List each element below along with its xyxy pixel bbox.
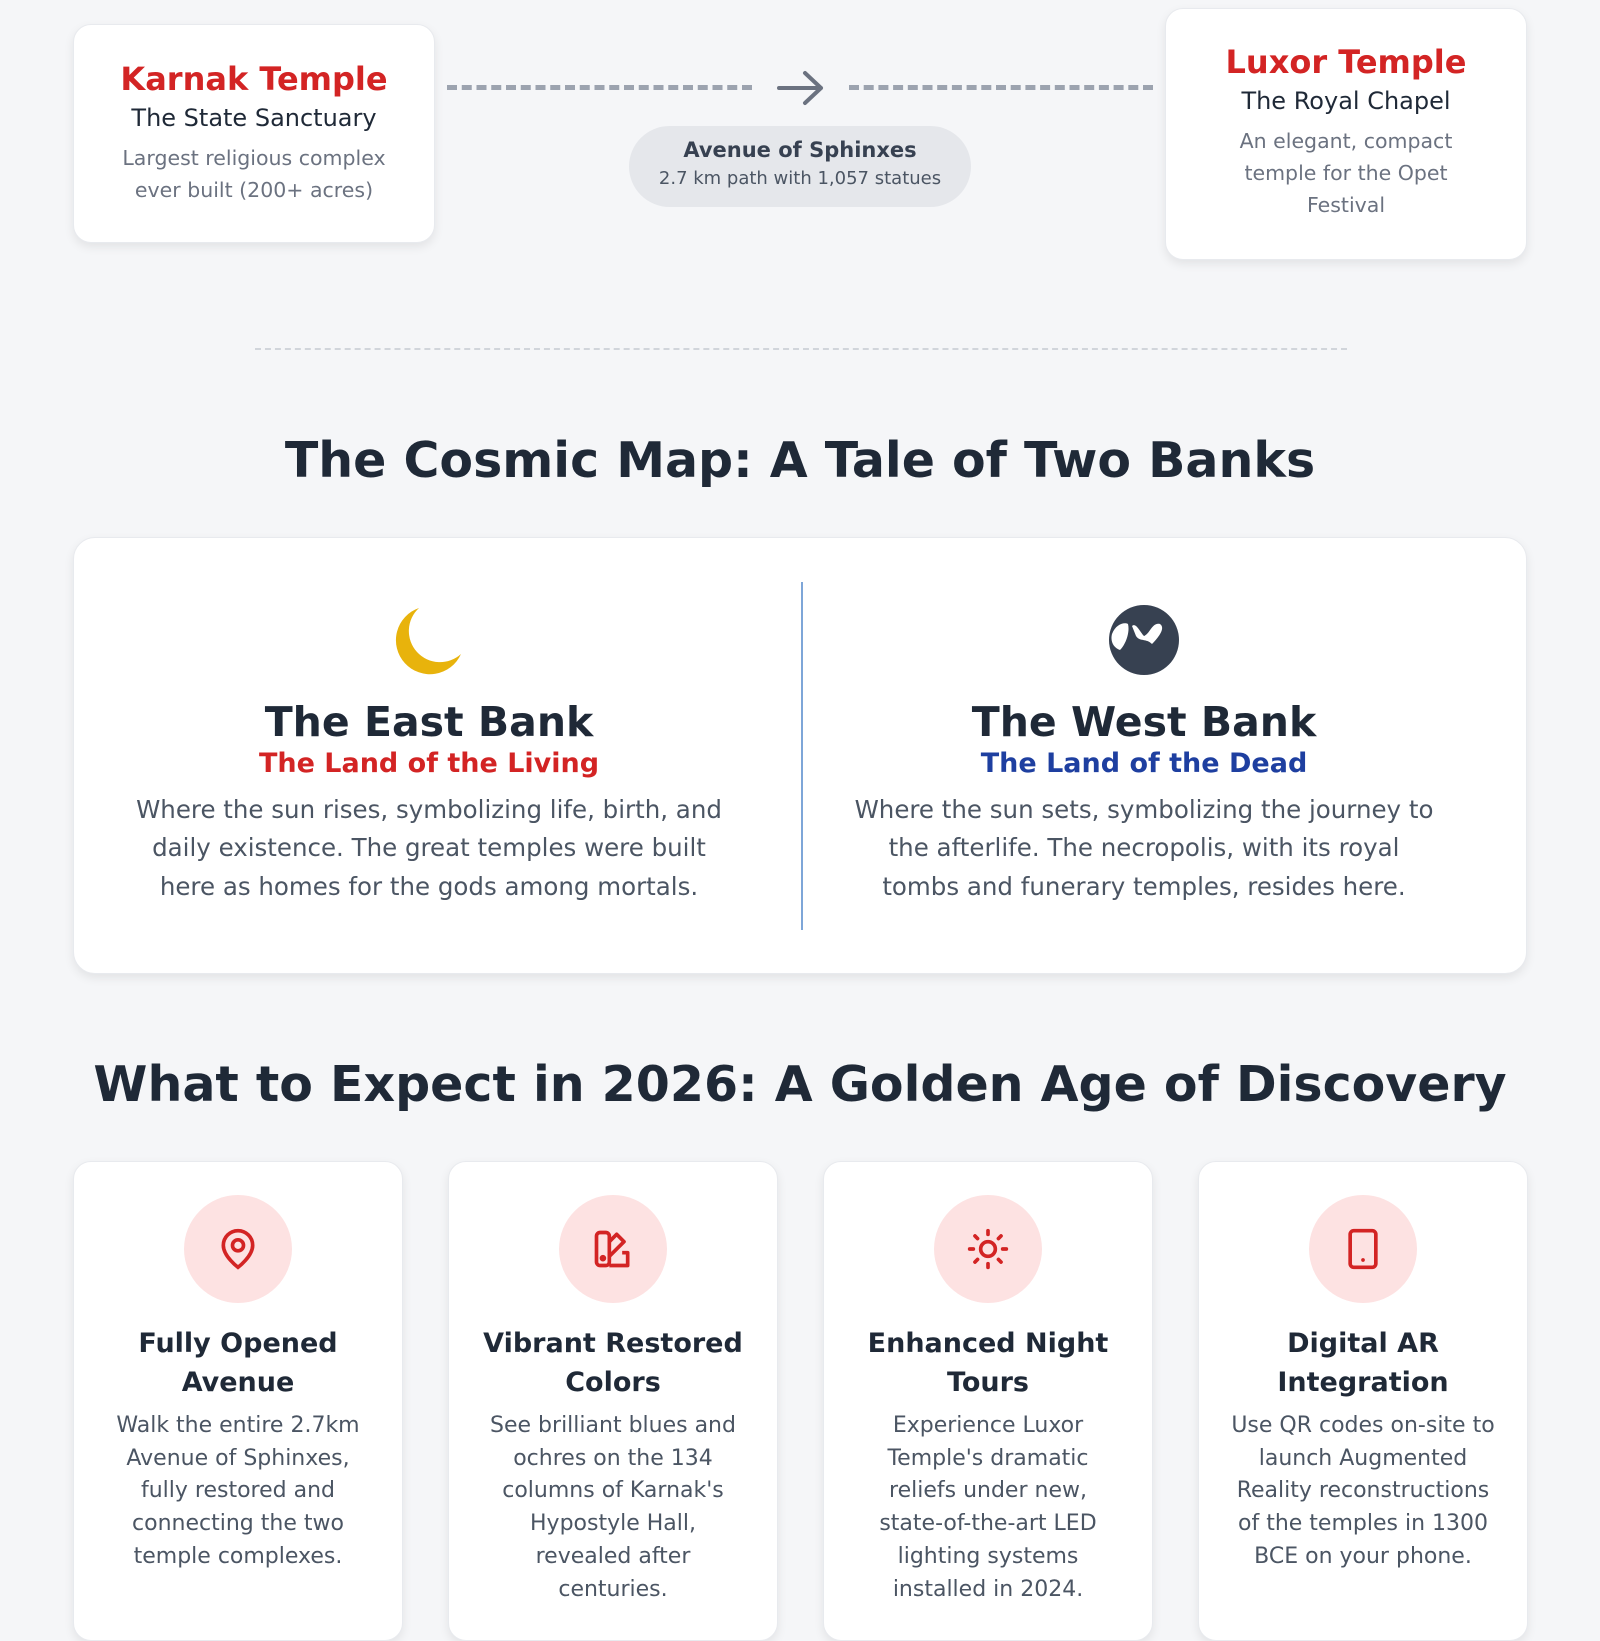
- card: Luxor Temple: Festival: [1307, 193, 1385, 217]
- card: Karnak Temple: Karnak Temple: [120, 60, 388, 98]
- card: Karnak Temple: ever built (200+ acres): [135, 178, 373, 202]
- card: Vibrant Restored Colors: Colors: [565, 1367, 661, 1398]
- card: Enhanced Night Tours: Experience Luxor Temple's dramatic reliefs under new, state-of-the-art LED lighting systems installed in 2024.: [879, 1413, 1097, 1602]
- card: Vibrant Restored Colors: [448, 1161, 778, 1641]
- west bank: [855, 605, 1433, 901]
- card: Digital AR Integration: [1198, 1161, 1528, 1641]
- card: Luxor Temple: The Royal Chapel: [1241, 87, 1451, 115]
- card: Luxor Temple: Luxor Temple: [1226, 43, 1466, 81]
- pill: Avenue of Sphinxes: 2.7 km path with 1,057 statues: [659, 168, 941, 189]
- east bank: [136, 608, 722, 901]
- icon: moon: [396, 608, 461, 674]
- card: Digital AR Integration: Digital AR: [1287, 1328, 1439, 1359]
- east bank: The East Bank: [265, 698, 593, 746]
- heading: What to Expect: What to Expect in 2026: A Golden Age of Discovery: [93, 1056, 1507, 1113]
- card: Luxor Temple: [1165, 8, 1527, 260]
- card: Fully Opened Avenue: Walk the entire 2.7km Avenue of Sphinxes, fully restored and connecting the two temple complexes.: [116, 1413, 360, 1569]
- card: Digital AR Integration: Integration: [1277, 1367, 1449, 1398]
- west bank: The Land of the Dead: [981, 748, 1307, 779]
- card: Digital AR Integration: Use QR codes on-site to launch Augmented Reality reconstructions of the temples in 1300 BCE on your phone.: [1231, 1413, 1495, 1569]
- card: Vibrant Restored Colors: Vibrant Restored: [483, 1328, 743, 1359]
- card: Luxor Temple: temple for the Opet: [1244, 161, 1448, 185]
- card: Karnak Temple: [73, 24, 435, 243]
- heading: Cosmic Map: The Cosmic Map: A Tale of Two Banks: [285, 432, 1315, 489]
- card: Karnak Temple: Largest religious complex: [122, 146, 386, 170]
- pill: Avenue of Sphinxes: Avenue of Sphinxes: [683, 138, 917, 162]
- card: Fully Opened Avenue: Fully Opened: [138, 1328, 338, 1359]
- card: Enhanced Night Tours: Tours: [947, 1367, 1029, 1398]
- pill: Avenue of Sphinxes: [629, 126, 971, 207]
- card: Fully Opened Avenue: Avenue: [182, 1367, 294, 1398]
- card: Luxor Temple: An elegant, compact: [1240, 129, 1452, 153]
- icon: arrow: [777, 70, 824, 106]
- west bank: The West Bank: [972, 698, 1316, 746]
- card: Karnak Temple: The State Sanctuary: [131, 104, 377, 132]
- icon: globe: [1109, 605, 1179, 675]
- panel: two banks: [73, 537, 1527, 974]
- east bank: Where the sun rises, symbolizing life, birth, and daily existence. The great temples were built here as homes for the gods among mortals.: [136, 795, 722, 901]
- card: Fully Opened Avenue: [73, 1161, 403, 1641]
- card: Vibrant Restored Colors: See brilliant blues and ochres on the 134 columns of Karnak's Hypostyle Hall, revealed after centuries.: [490, 1413, 736, 1602]
- card: Enhanced Night Tours: [823, 1161, 1153, 1641]
- west bank: Where the sun sets, symbolizing the journey to the afterlife. The necropolis, with its royal tombs and funerary temples, resides here.: [855, 795, 1433, 901]
- card: Enhanced Night Tours: Enhanced Night: [868, 1328, 1108, 1359]
- dashed path with arrow: [447, 70, 1153, 106]
- east bank: The Land of the Living: [259, 748, 599, 779]
